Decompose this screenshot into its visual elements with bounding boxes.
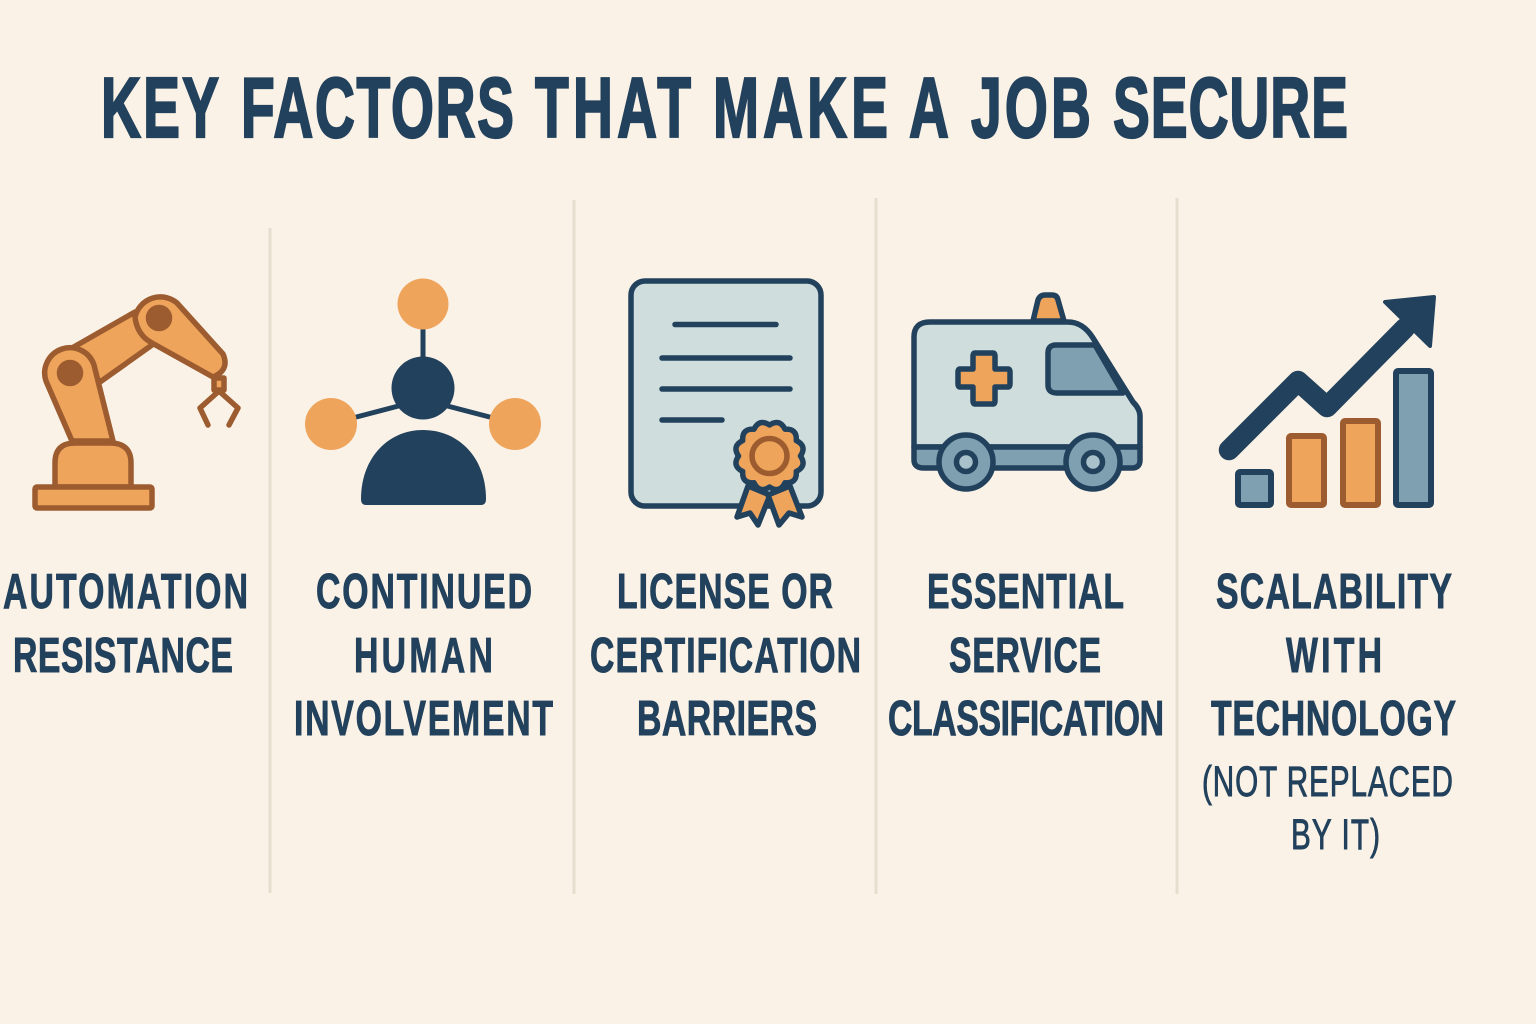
panel: essential service classification	[888, 295, 1164, 745]
label: scalability with technology	[1211, 564, 1456, 745]
note: not replaced by it	[1202, 758, 1453, 858]
label: automation resistance: RESISTANCE	[13, 628, 233, 682]
panel: automation resistance	[3, 297, 248, 682]
label: essential service classification: ESSENTIAL	[927, 564, 1124, 618]
icon: ambulance	[914, 295, 1140, 489]
label: scalability with technology: SCALABILITY	[1216, 564, 1452, 618]
label: automation resistance: AUTOMATION	[3, 564, 248, 618]
title: THAT	[535, 61, 691, 156]
title: KEY	[101, 61, 219, 156]
note: not replaced by it: (NOT REPLACED	[1202, 758, 1453, 805]
title: A	[909, 61, 949, 156]
label: license or certification barriers	[590, 564, 861, 745]
label: scalability with technology: WITH	[1286, 628, 1382, 682]
label: automation resistance	[3, 564, 248, 682]
icon: person network	[305, 278, 541, 505]
label: continued human involvement: HUMAN	[354, 628, 493, 682]
icon: growth bar chart with arrow	[1229, 297, 1434, 505]
title	[101, 61, 1348, 156]
label: license or certification barriers: BARRIERS	[637, 691, 817, 745]
icon: robot arm	[35, 297, 238, 508]
label: license or certification barriers: CERTIFICATION	[590, 628, 861, 682]
label: essential service classification: CLASSIFICATION	[888, 691, 1164, 745]
icon: certificate with seal	[631, 281, 821, 525]
label: continued human involvement: INVOLVEMENT	[294, 691, 553, 745]
label: continued human involvement: CONTINUED	[316, 564, 532, 618]
label: essential service classification	[888, 564, 1164, 745]
panel: continued human involvement	[294, 278, 553, 745]
title: JOB	[971, 61, 1091, 156]
panel: scalability with technology	[1202, 297, 1456, 858]
title: MAKE	[713, 61, 888, 156]
title: SECURE	[1113, 61, 1348, 156]
panel: license or certification barriers	[590, 281, 861, 745]
label: license or certification barriers: LICENSE OR	[617, 564, 833, 618]
title: FACTORS	[241, 61, 514, 156]
label: essential service classification: SERVICE	[949, 628, 1101, 682]
note: not replaced by it: BY IT)	[1291, 811, 1380, 858]
label: continued human involvement	[294, 564, 553, 745]
label: scalability with technology: TECHNOLOGY	[1211, 691, 1456, 745]
